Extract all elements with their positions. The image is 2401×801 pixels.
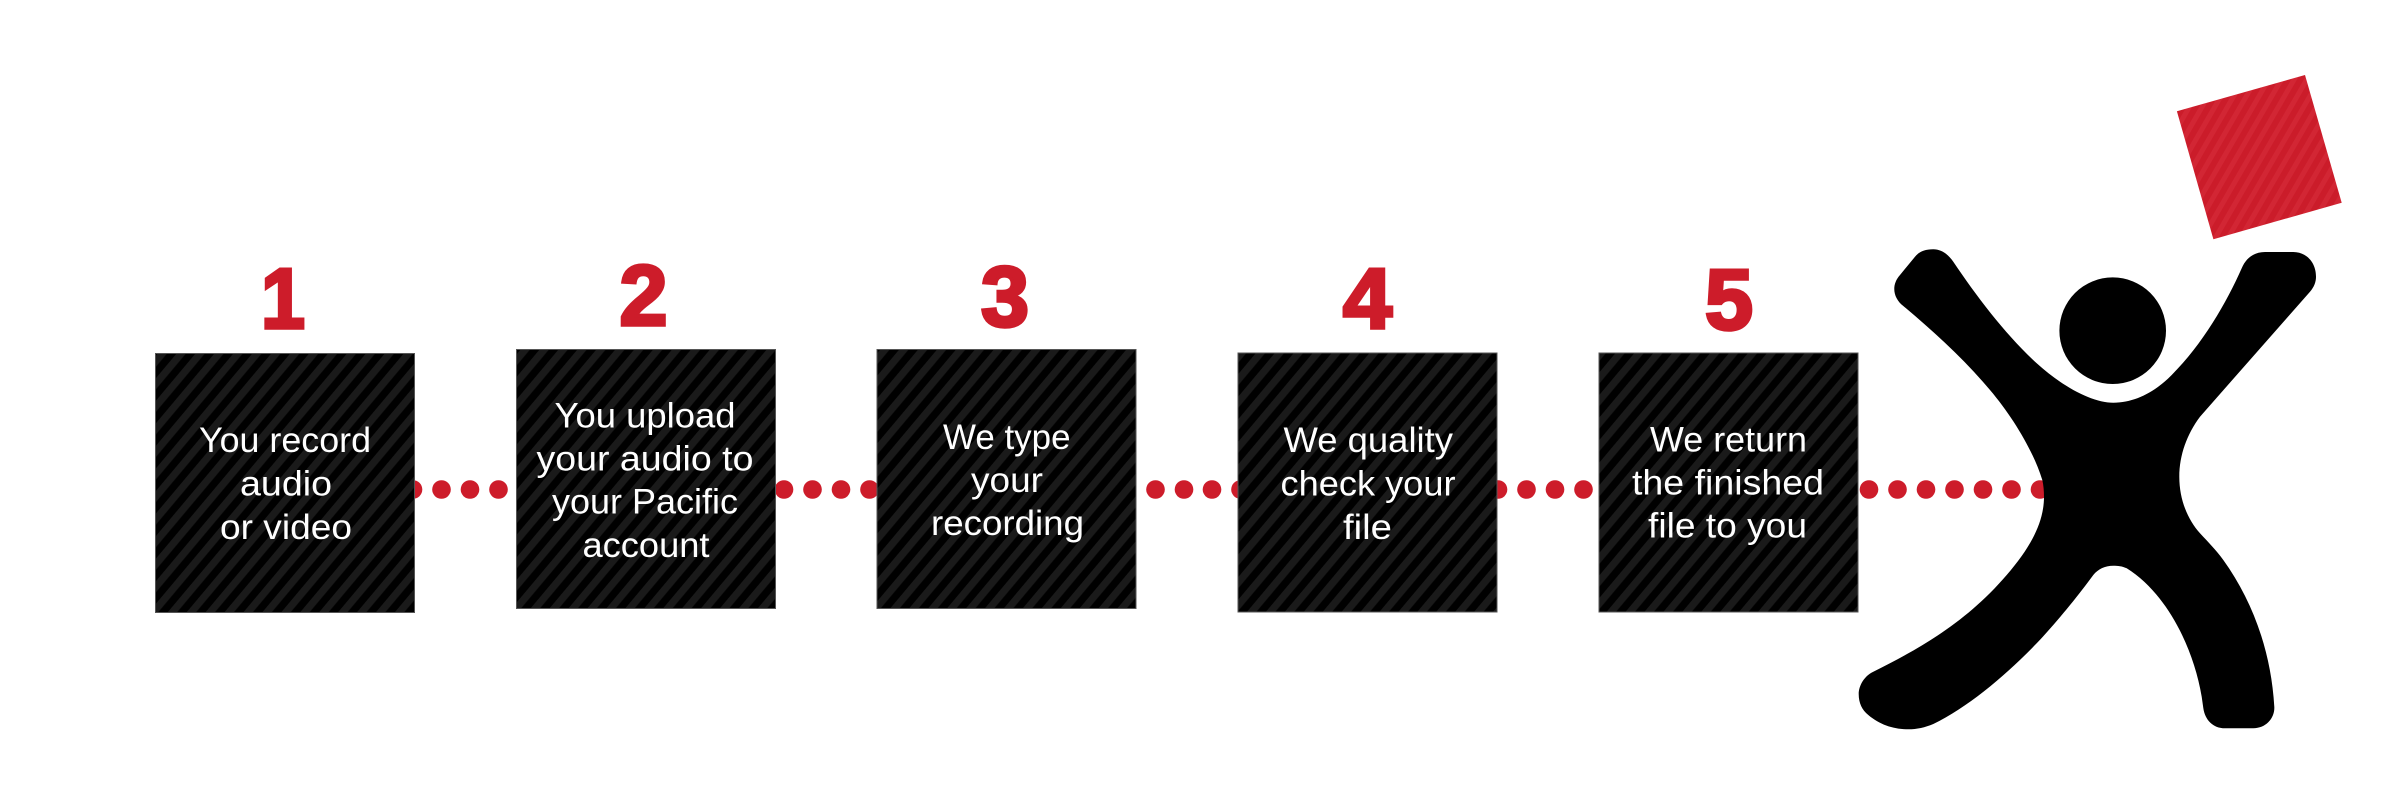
text: step 5 — [1632, 420, 1824, 546]
text: step 5: the finished — [1632, 464, 1824, 502]
text: step 3: recording — [931, 504, 1084, 543]
text: step 4: check your — [1280, 464, 1456, 504]
number 5: 5 — [1705, 253, 1753, 348]
box 5 — [1599, 353, 1858, 612]
number 1: 1 — [261, 252, 305, 347]
text: step 1: or video — [220, 508, 352, 547]
text: step 4 — [1280, 421, 1456, 547]
text: step 3: your — [971, 461, 1043, 500]
panel: step 1 — [156, 252, 414, 612]
text: step 5: We return — [1650, 420, 1807, 460]
text: step 4: We quality — [1284, 421, 1454, 460]
box 3 — [877, 350, 1136, 608]
text: step 2: your Pacific — [552, 482, 738, 522]
text: step 2: your audio to — [536, 440, 754, 478]
box 2 — [516, 350, 776, 608]
number 3: 3 — [981, 250, 1029, 345]
text: step 2: You upload — [554, 396, 736, 436]
number 2: 2 — [620, 249, 668, 344]
box 1 — [156, 354, 414, 612]
panel: step 4 — [1238, 252, 1497, 612]
panel: step 3 — [877, 250, 1136, 608]
icon: tossed red square — [2177, 75, 2342, 239]
icon: celebrating person — [1859, 249, 2316, 729]
text: step 1 — [199, 421, 371, 547]
panel: step 5 — [1599, 253, 1858, 612]
person body — [1859, 249, 2316, 729]
text: step 3 — [931, 418, 1084, 543]
box 4 — [1238, 353, 1497, 612]
dotted connector: steps to figure — [404, 480, 2049, 499]
text: step 1: You record — [199, 421, 371, 460]
text: step 3: We type — [943, 418, 1070, 457]
number 4: 4 — [1343, 252, 1392, 347]
text: step 4: file — [1343, 508, 1392, 547]
text: step 2 — [536, 396, 754, 565]
text: step 2: account — [582, 526, 710, 565]
text: step 5: file to you — [1648, 506, 1807, 546]
person head — [2059, 277, 2166, 384]
text: step 1: audio — [240, 464, 332, 504]
panel: step 2 — [516, 249, 776, 608]
